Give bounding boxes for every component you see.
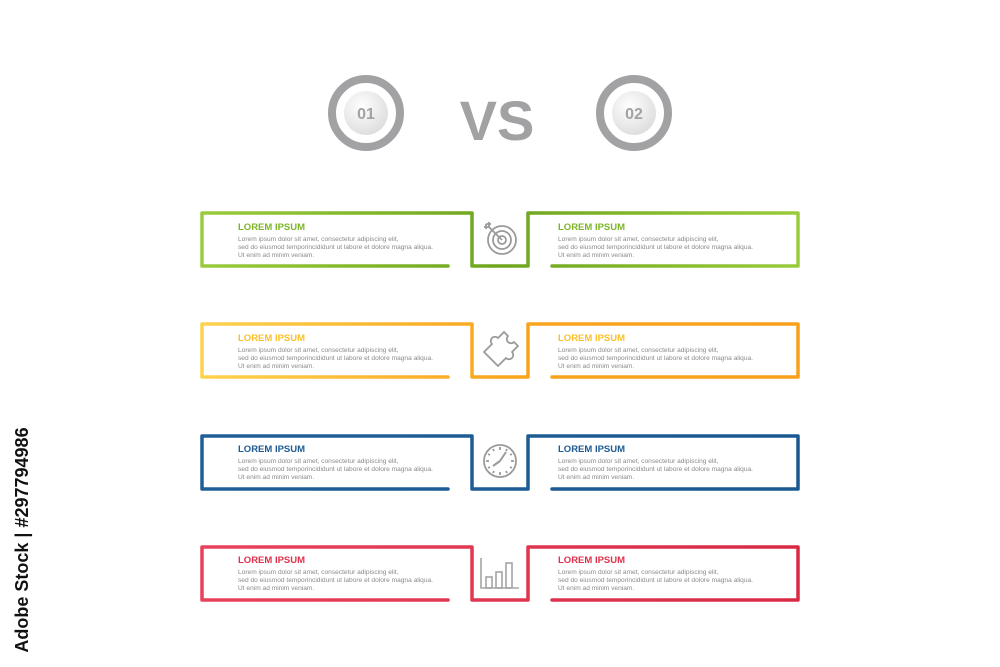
row 1 green: LOREM IPSUM [558,222,625,233]
row 4 red: sed do eiusmod temporincididunt ut labore et dolore magna aliqua. [558,577,753,584]
row 3 blue: sed do eiusmod temporincididunt ut labore et dolore magna aliqua. [558,466,753,473]
row 2 yellow: sed do eiusmod temporincididunt ut labore et dolore magna aliqua. [558,355,753,362]
row 3 blue: Ut enim ad minim veniam. [238,474,314,481]
row 4 red: Ut enim ad minim veniam. [558,585,634,592]
row 3 blue: sed do eiusmod temporincididunt ut labore et dolore magna aliqua. [238,466,433,473]
row 4 red: Lorem ipsum dolor sit amet, consectetur adipiscing elit, [558,569,719,576]
row 3 blue: Ut enim ad minim veniam. [558,474,634,481]
side stock text: Adobe Stock | #297794986 [12,427,32,653]
row 2 yellow: LOREM IPSUM [558,333,625,344]
row 2 yellow: Ut enim ad minim veniam. [238,363,314,370]
row 1 green: Lorem ipsum dolor sit amet, consectetur adipiscing elit, [558,236,719,243]
row 1 green [202,213,798,266]
badge 01 [332,79,400,147]
row 4 red: Lorem ipsum dolor sit amet, consectetur adipiscing elit, [238,569,399,576]
icon: target [484,222,516,254]
row 1 green: LOREM IPSUM [238,222,305,233]
row 4 red: Ut enim ad minim veniam. [238,585,314,592]
row 2 yellow: sed do eiusmod temporincididunt ut labore et dolore magna aliqua. [238,355,433,362]
row 2 yellow: Ut enim ad minim veniam. [558,363,634,370]
row 3 blue: Lorem ipsum dolor sit amet, consectetur adipiscing elit, [238,458,399,465]
row 3 blue: Lorem ipsum dolor sit amet, consectetur adipiscing elit, [558,458,719,465]
row 2 yellow: Lorem ipsum dolor sit amet, consectetur adipiscing elit, [238,347,399,354]
row 2 yellow: Lorem ipsum dolor sit amet, consectetur adipiscing elit, [558,347,719,354]
row 1 green: Lorem ipsum dolor sit amet, consectetur adipiscing elit, [238,236,399,243]
row 3 blue: LOREM IPSUM [238,444,305,455]
vs heading: VS [460,89,534,152]
row 4 red: LOREM IPSUM [558,555,625,566]
icon: clock [484,445,516,477]
row 3 blue: LOREM IPSUM [558,444,625,455]
badge 02: 02 [625,106,643,123]
icon: bar chart [481,558,519,588]
icon: puzzle [484,332,518,366]
badge 02 [600,79,668,147]
row 2 yellow: LOREM IPSUM [238,333,305,344]
row 1 green: sed do eiusmod temporincididunt ut labore et dolore magna aliqua. [238,244,433,251]
row 3 blue [202,436,798,489]
row 4 red: sed do eiusmod temporincididunt ut labore et dolore magna aliqua. [238,577,433,584]
row 4 red [202,547,798,600]
row 1 green: Ut enim ad minim veniam. [558,252,634,259]
row 4 red: LOREM IPSUM [238,555,305,566]
badge 01: 01 [357,106,375,123]
row 1 green: Ut enim ad minim veniam. [238,252,314,259]
row 2 yellow [202,324,798,377]
row 1 green: sed do eiusmod temporincididunt ut labore et dolore magna aliqua. [558,244,753,251]
